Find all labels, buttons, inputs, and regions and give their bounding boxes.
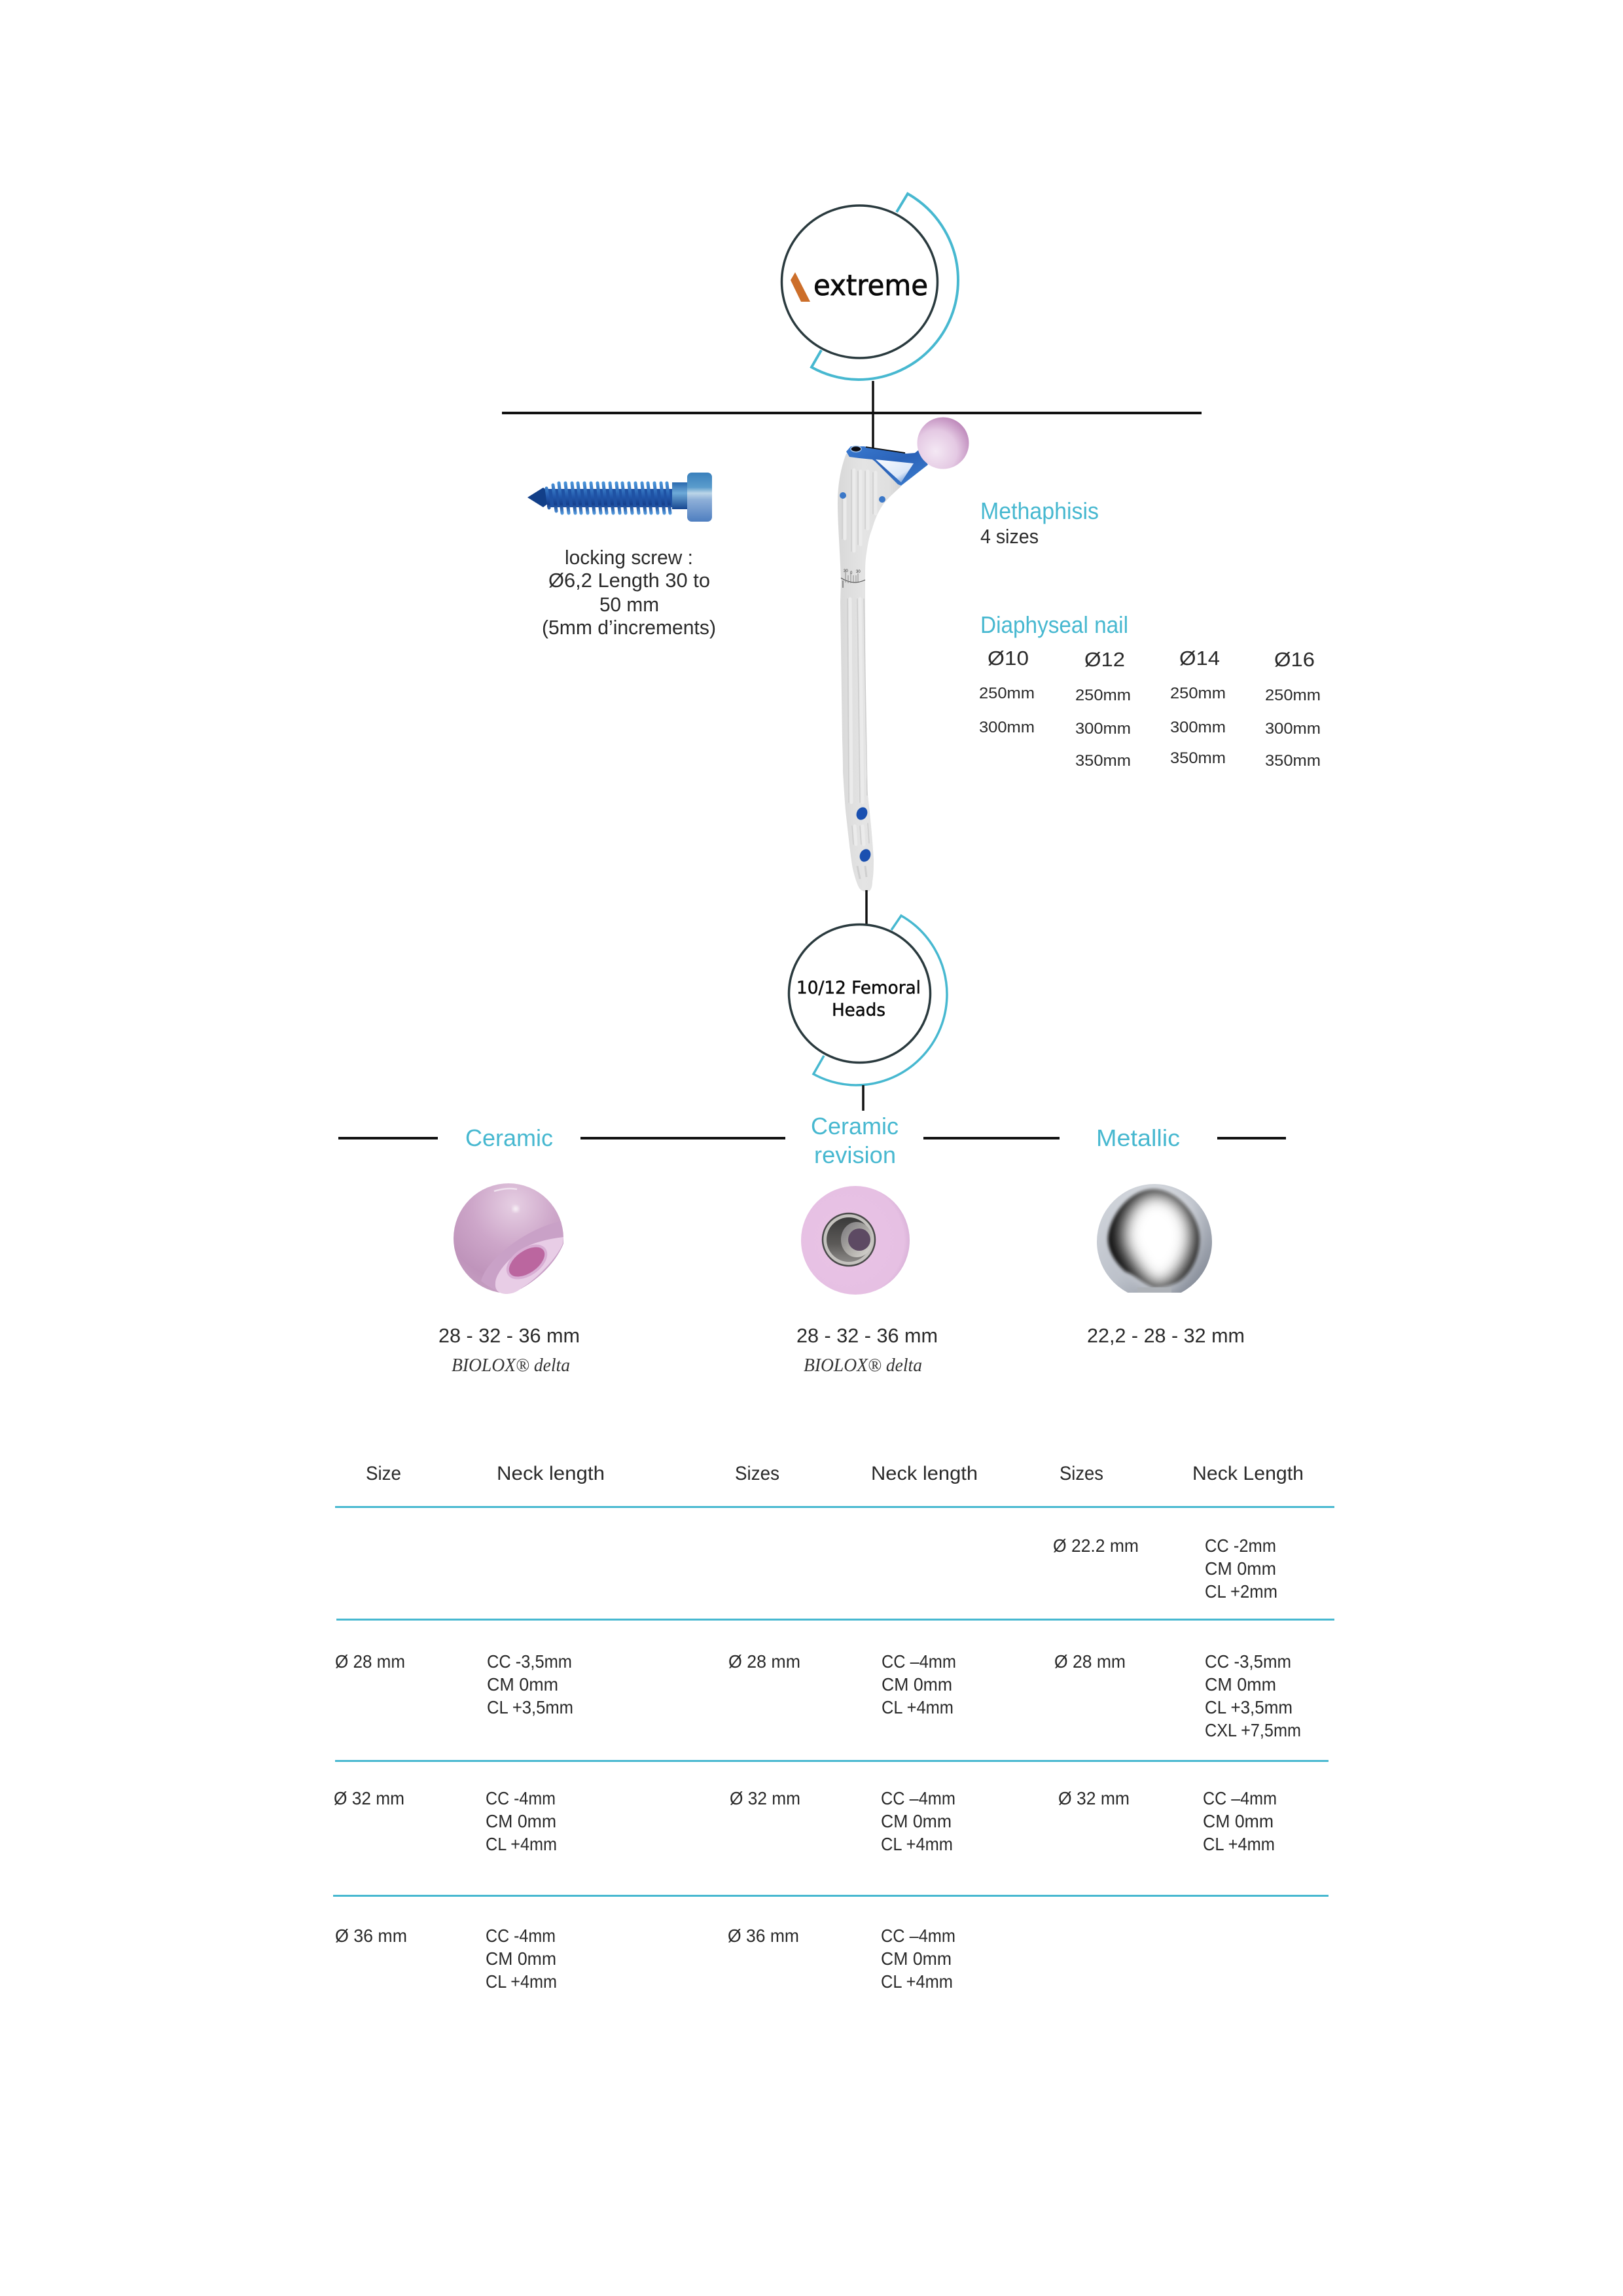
heading: Metallic: Metallic: [1096, 1124, 1180, 1151]
table header: Sizes: [735, 1463, 779, 1484]
table row: 22.2 mm: CM 0mm: [1205, 1558, 1276, 1579]
table row: 36 mm: Ø 36 mm: [728, 1926, 799, 1946]
table row: 28 mm: CC -3,5mm: [487, 1651, 572, 1672]
Diaphyseal nail table: 250mm: [1170, 685, 1226, 702]
table row: 32 mm: Ø 32 mm: [1058, 1788, 1130, 1808]
Diaphyseal nail table: 300mm: [1170, 719, 1226, 736]
bore: [848, 1229, 870, 1251]
table row: 22.2 mm: [1053, 1535, 1277, 1602]
scale marks: 30: [844, 569, 848, 573]
locking screw caption: 50 mm: [599, 593, 659, 616]
table row: 28 mm: CM 0mm: [882, 1674, 952, 1695]
distal tip grooves: [857, 866, 866, 879]
Diaphyseal nail table: 350mm: [1170, 749, 1226, 767]
ceramic head: [454, 1183, 563, 1294]
Diaphyseal nail table: 300mm: [1265, 720, 1321, 738]
groove highlights: [845, 470, 876, 844]
top glare: [494, 1189, 517, 1191]
table row: 32 mm: CM 0mm: [486, 1811, 556, 1831]
table row: 32 mm: CL +4mm: [1203, 1834, 1275, 1854]
sphere: [1097, 1184, 1212, 1299]
table row: 28 mm: Ø 28 mm: [728, 1651, 800, 1672]
table row: 36 mm: CM 0mm: [881, 1948, 952, 1969]
table row: 36 mm: Ø 36 mm: [335, 1926, 407, 1946]
table row: 28 mm: CM 0mm: [487, 1674, 558, 1695]
metallic sizes caption: 22,2 - 28 - 32 mm: [1087, 1324, 1245, 1347]
white glare: [1122, 1193, 1192, 1288]
table row: 36 mm: CL +4mm: [881, 1971, 953, 1992]
inner taper: [841, 1222, 872, 1257]
table row: 36 mm: CL +4mm: [486, 1971, 557, 1992]
circle: [781, 206, 937, 358]
Diaphyseal nail table: Ø10: [988, 647, 1029, 670]
table row: 28 mm: CL +3,5mm: [487, 1697, 573, 1717]
flat ring: [495, 1237, 563, 1294]
locking screw caption: [542, 546, 716, 639]
table row: 28 mm: [335, 1651, 1301, 1740]
Diaphyseal nail table: Ø16: [1274, 648, 1315, 671]
screw neck: [672, 482, 688, 509]
locking screw caption: locking screw :: [565, 546, 693, 569]
dark reflection: [1108, 1189, 1200, 1287]
table row: 32 mm: CC -4mm: [486, 1788, 556, 1808]
table row: 22.2 mm: Ø 22.2 mm: [1053, 1535, 1139, 1556]
logo badge: extreme: [781, 194, 958, 380]
heading: Ceramic revision: [811, 1113, 899, 1168]
table row: 36 mm: [335, 1926, 955, 1992]
screw head: [687, 473, 712, 522]
table row: 28 mm: CL +4mm: [882, 1697, 954, 1717]
screw tip: [527, 488, 556, 507]
Diaphyseal nail table: 250mm: [1265, 687, 1321, 704]
sphere: [454, 1183, 563, 1293]
table row: 22.2 mm: CC -2mm: [1205, 1535, 1276, 1556]
table header: Sizes: [1060, 1463, 1103, 1484]
neck window: [876, 459, 914, 482]
table row: 32 mm: CC –4mm: [1203, 1788, 1277, 1808]
ceramic revision sizes caption: 28 - 32 - 36 mm: [796, 1324, 938, 1347]
Diaphyseal nail table: Diaphyseal nail: [980, 611, 1128, 638]
Methaphisis label: [980, 497, 1099, 548]
cyan arc: [812, 194, 958, 380]
outer taper: [481, 1221, 563, 1293]
neck top edge: [866, 447, 905, 453]
connector: logo to horizontal rule: [872, 381, 874, 452]
table row: 36 mm: CM 0mm: [486, 1948, 556, 1969]
ceramic sizes caption: 28 - 32 - 36 mm: [438, 1324, 580, 1347]
table row: 28 mm: CC -3,5mm: [1205, 1651, 1291, 1672]
Diaphyseal nail table: 350mm: [1075, 752, 1131, 770]
Diaphyseal nail table: 350mm: [1265, 752, 1321, 770]
Diaphyseal nail table: Ø12: [1084, 648, 1125, 671]
table header: Neck length: [871, 1463, 978, 1484]
metal sleeve: [823, 1213, 875, 1266]
sleeve interior: [827, 1217, 871, 1262]
table row: 22.2 mm: CL +2mm: [1205, 1581, 1277, 1602]
Methaphisis label: 4 sizes: [980, 525, 1039, 548]
Diaphyseal nail table: 300mm: [979, 719, 1035, 736]
screw core: [547, 489, 673, 507]
table row: 32 mm: CL +4mm: [486, 1834, 557, 1854]
Diaphyseal nail table: 250mm: [979, 685, 1035, 702]
table row: 32 mm: CL +4mm: [881, 1834, 953, 1854]
table header: Neck Length: [1192, 1463, 1304, 1484]
heading: Ceramic: Ceramic: [465, 1124, 553, 1151]
table row: 36 mm: CC –4mm: [881, 1926, 955, 1946]
metallic head: [1097, 1184, 1212, 1299]
distal holes: [855, 806, 872, 863]
locking screw caption: Ø6,2 Length 30 to: [548, 569, 710, 592]
badge text: 10/12 Femoral: [796, 978, 921, 998]
Diaphyseal nail table: 300mm: [1075, 720, 1131, 738]
Methaphisis label: Methaphisis: [980, 497, 1099, 524]
base: [1137, 1287, 1171, 1293]
highlight: [513, 1206, 518, 1211]
heading: Ceramic revision: Ceramic: [811, 1113, 899, 1139]
table row: 28 mm: Ø 28 mm: [1054, 1651, 1126, 1672]
connector: badge to branch line: [862, 1085, 865, 1111]
table rules: [333, 1506, 1334, 1897]
neck bore: [851, 446, 861, 452]
screw threads: [546, 483, 670, 513]
ceramic revision sizes caption: [796, 1324, 938, 1376]
scale marks: [841, 569, 865, 588]
table row: 32 mm: Ø 32 mm: [730, 1788, 800, 1808]
logo word: extreme: [813, 269, 928, 302]
table row: 28 mm: CXL +7,5mm: [1205, 1720, 1301, 1740]
ceramic sizes caption: [438, 1324, 580, 1376]
implant stem: [838, 418, 969, 891]
locking screw caption: (5mm d’increments): [542, 616, 716, 639]
head ball: [918, 418, 969, 469]
table row: 28 mm: Ø 28 mm: [335, 1651, 405, 1672]
ceramic sizes caption: BIOLOX® delta: [452, 1355, 570, 1376]
table row: 32 mm: Ø 32 mm: [334, 1788, 404, 1808]
heading: Ceramic revision: revision: [814, 1141, 896, 1168]
femoral heads badge: [789, 916, 947, 1085]
scale marks: 30: [856, 570, 861, 574]
table header: Size: [366, 1463, 401, 1484]
table row: 28 mm: CL +3,5mm: [1205, 1697, 1293, 1717]
badge text: Heads: [832, 1000, 885, 1020]
table row: 32 mm: CC –4mm: [881, 1788, 955, 1808]
table row: 36 mm: CC -4mm: [486, 1926, 556, 1946]
table row: 32 mm: CM 0mm: [1203, 1811, 1274, 1831]
table header: Neck length: [497, 1463, 605, 1484]
connector: implant to femoral heads: [865, 890, 868, 924]
blue neck: [846, 446, 928, 486]
groove shadows: [842, 470, 873, 844]
stem body: [838, 454, 901, 891]
bore: [502, 1240, 552, 1284]
table row: 28 mm: CM 0mm: [1205, 1674, 1276, 1695]
scale marks: 0: [850, 571, 853, 575]
cyan arc: [813, 916, 947, 1085]
table row: 32 mm: CM 0mm: [881, 1811, 952, 1831]
circle: [789, 924, 931, 1063]
table header: [366, 1463, 1304, 1484]
badge text: [796, 978, 921, 1020]
table row: 32 mm: [334, 1788, 1277, 1854]
ceramic revision sizes caption: BIOLOX® delta: [804, 1355, 922, 1376]
Diaphyseal nail table: Ø14: [1179, 647, 1220, 670]
Diaphyseal nail table: 250mm: [1075, 687, 1131, 704]
sphere: [801, 1186, 910, 1295]
Diaphyseal nail table: [979, 611, 1321, 770]
table row: 28 mm: CC –4mm: [882, 1651, 956, 1672]
small holes: [840, 492, 885, 503]
logo mark: [791, 272, 810, 302]
locking screw: [527, 473, 712, 522]
ceramic revision head: [801, 1186, 910, 1295]
horizontal rule: [502, 412, 1202, 414]
branch line: [338, 1137, 1286, 1139]
